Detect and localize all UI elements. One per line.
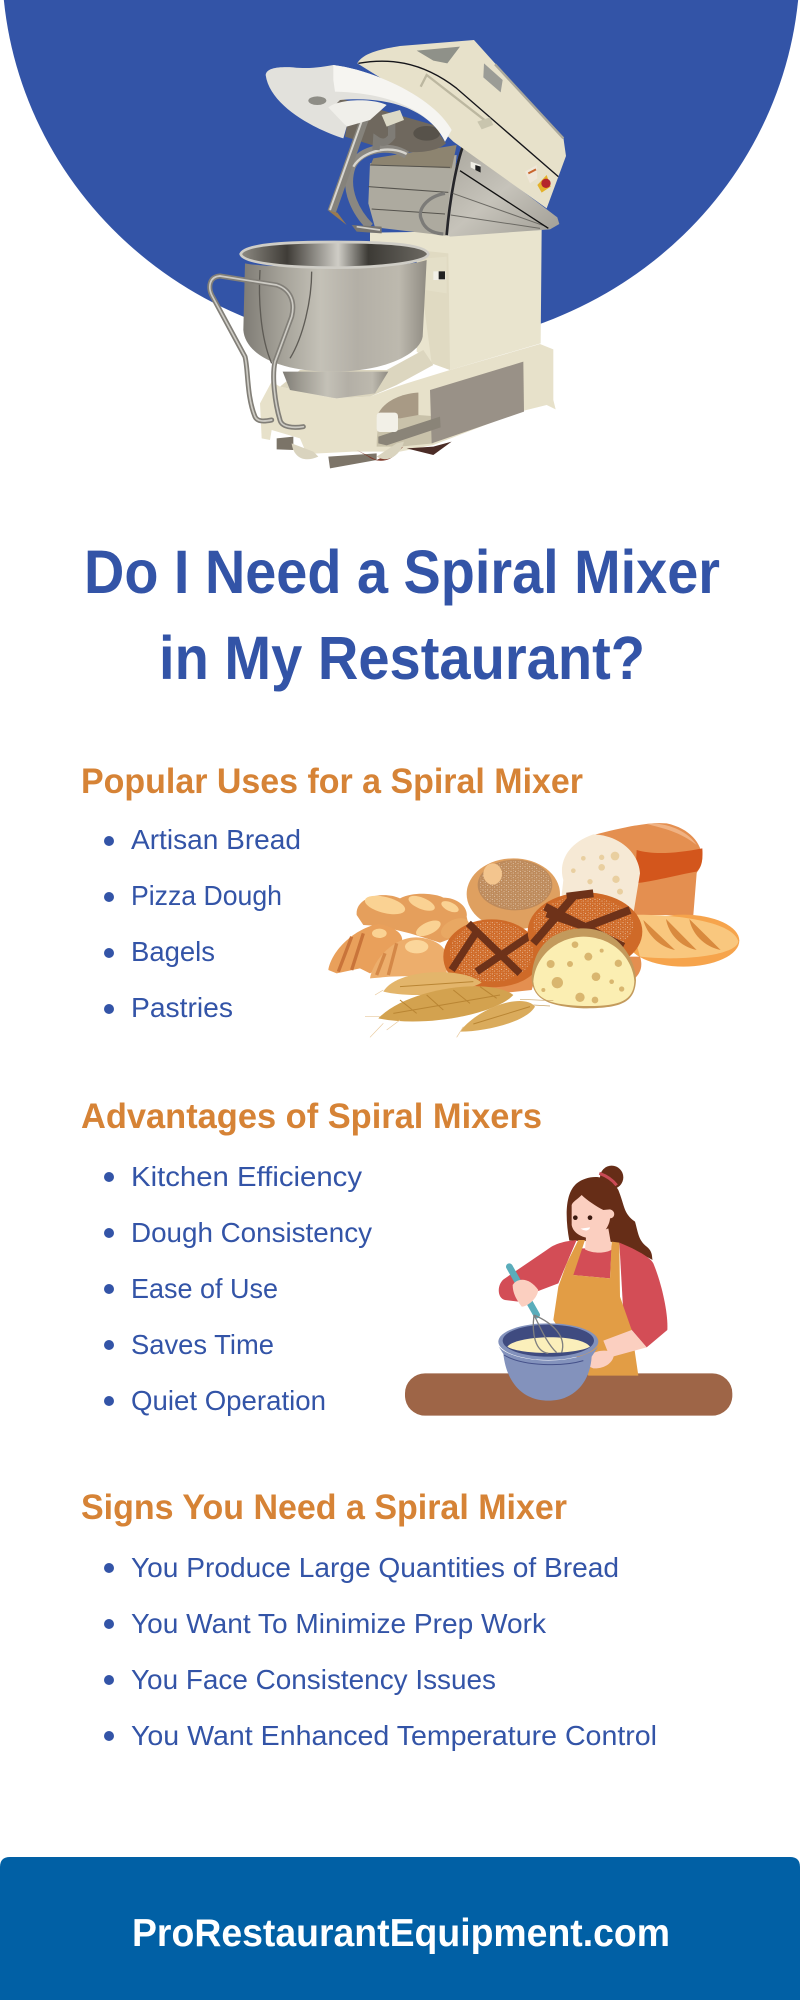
list: popular uses: Artisan Bread — [131, 824, 301, 855]
list: signs: You Want To Minimize Prep Work — [131, 1608, 547, 1639]
mixer head and dough hook — [266, 40, 566, 237]
title: Do I Need a Spiral Mixer — [84, 538, 720, 606]
footer website: ProRestaurantEquipment.com — [132, 1912, 670, 1955]
heading: signs: Signs You Need a Spiral Mixer — [81, 1488, 567, 1527]
illustration: assorted breads — [328, 823, 739, 1037]
panel: advantages — [81, 1097, 732, 1416]
footer band — [0, 1857, 800, 2000]
list: signs: You Face Consistency Issues — [131, 1664, 496, 1695]
title: in My Restaurant? — [159, 624, 645, 692]
panel: popular uses — [81, 762, 739, 1037]
list: advantages: Saves Time — [131, 1329, 274, 1360]
mixer column — [370, 230, 542, 370]
heading: popular uses: Popular Uses for a Spiral Mixer — [81, 762, 583, 801]
spiral mixer machine — [210, 40, 566, 468]
list: popular uses: Pastries — [131, 992, 233, 1023]
list: advantages: Dough Consistency — [131, 1217, 372, 1248]
list: popular uses: Bagels — [131, 936, 215, 967]
list: signs: You Produce Large Quantities of Bread — [131, 1552, 619, 1583]
list: advantages: Quiet Operation — [131, 1385, 326, 1416]
illustration: baker whisking in a bowl — [405, 1166, 732, 1416]
list: advantages: Kitchen Efficiency — [131, 1161, 362, 1192]
list: advantages: Ease of Use — [131, 1273, 278, 1304]
list: popular uses — [104, 824, 301, 1023]
blue semicircle background — [2, 0, 800, 348]
mixer bowl, base and handle — [210, 241, 556, 468]
list: advantages — [104, 1161, 372, 1416]
list: signs — [104, 1552, 657, 1751]
title — [84, 538, 720, 692]
list: popular uses: Pizza Dough — [131, 880, 282, 911]
heading: advantages: Advantages of Spiral Mixers — [81, 1097, 542, 1136]
panel: signs — [81, 1488, 657, 1751]
list: signs: You Want Enhanced Temperature Control — [131, 1720, 657, 1751]
